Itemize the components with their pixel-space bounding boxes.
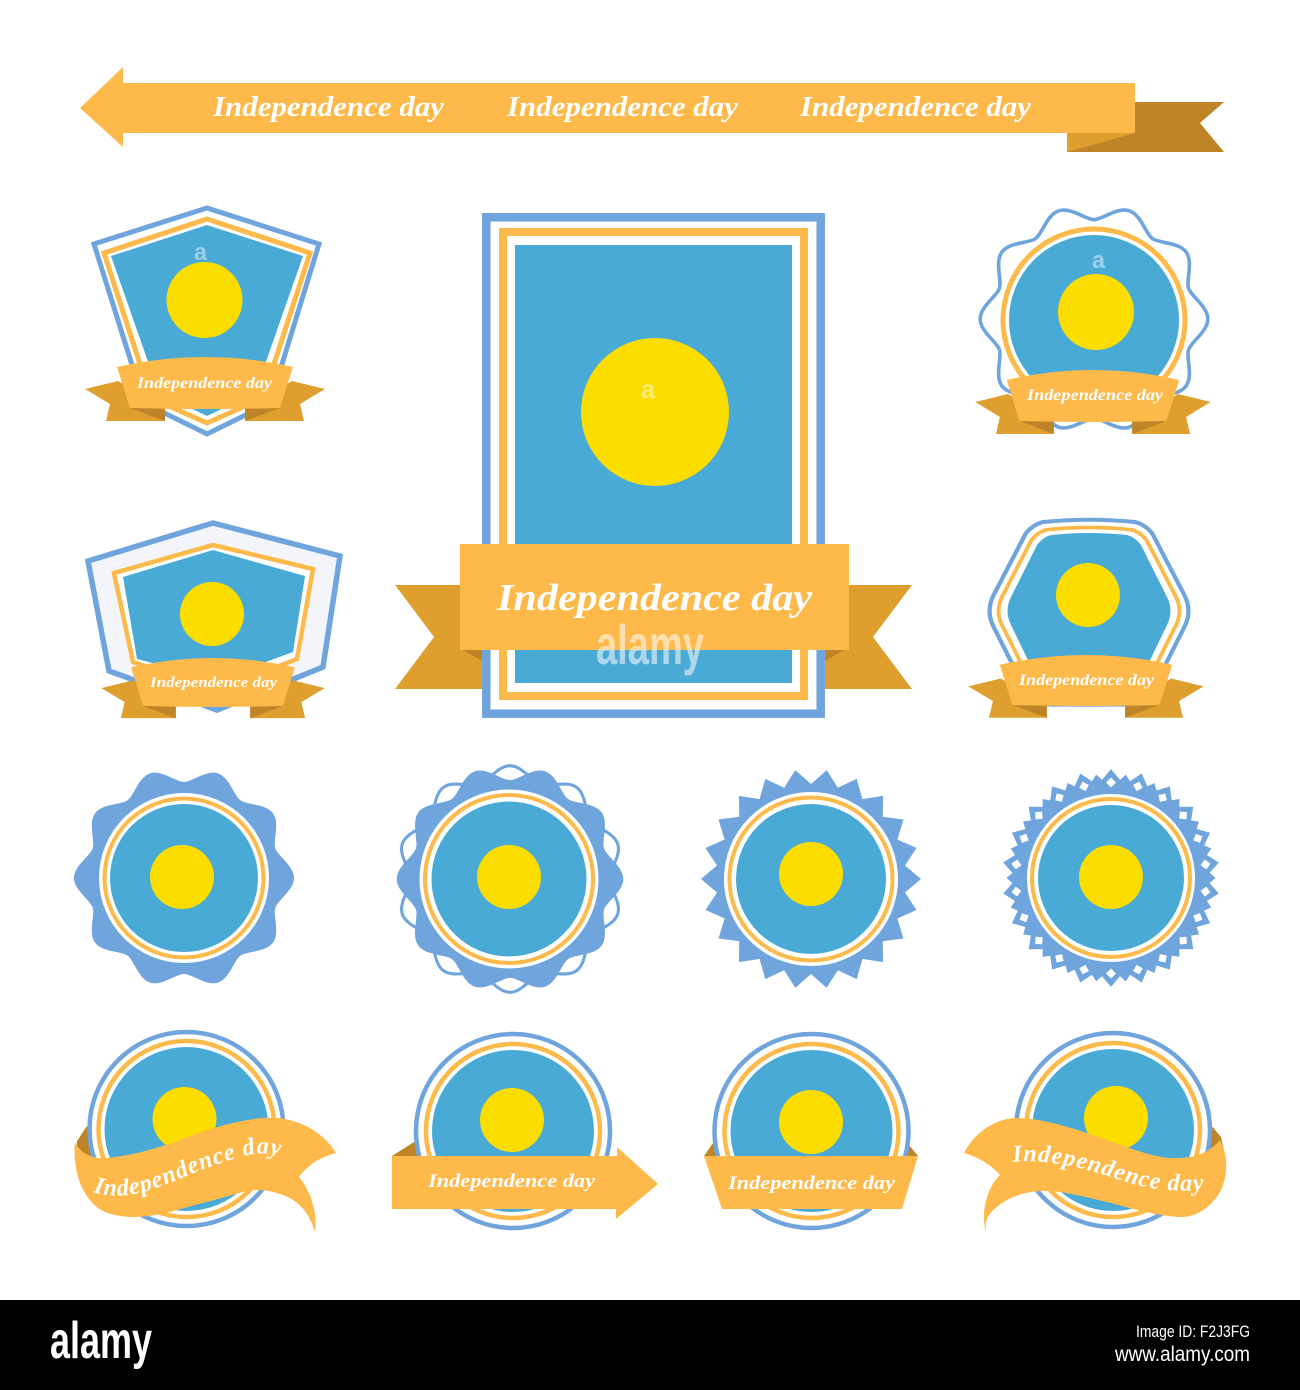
orange shield ring xyxy=(114,545,313,690)
flag field xyxy=(515,245,792,683)
yellow disc xyxy=(1084,1086,1148,1150)
yellow disc xyxy=(152,1087,216,1151)
ribbon fold xyxy=(1200,1125,1226,1160)
hollow diamonds xyxy=(1011,778,1211,978)
yellow disc xyxy=(477,845,541,909)
shield badge 2 xyxy=(88,523,340,718)
banner text 1: Independence day xyxy=(212,92,445,123)
orange frame xyxy=(503,232,804,696)
watermark: alamy xyxy=(596,613,704,676)
ribbon xyxy=(101,658,325,718)
yellow disc xyxy=(1056,563,1120,627)
logo: alamy xyxy=(50,1312,152,1370)
banner tail xyxy=(1067,102,1224,152)
url: www.alamy.com xyxy=(1114,1343,1250,1366)
yellow disc xyxy=(779,842,843,906)
orange ring xyxy=(98,1041,274,1217)
flag field xyxy=(730,1050,892,1212)
flag field xyxy=(110,804,258,952)
outer shield xyxy=(88,523,340,710)
flag field xyxy=(1038,805,1184,951)
hollow star seal xyxy=(994,760,1228,996)
orange ring xyxy=(1003,229,1185,411)
banner text 3: Independence day xyxy=(799,92,1032,123)
wave outline xyxy=(980,201,1208,437)
outer hexagon xyxy=(990,520,1188,705)
blue ring xyxy=(416,1034,610,1228)
trapezoid ribbon xyxy=(704,1156,918,1209)
blue ring xyxy=(90,1032,284,1226)
star burst xyxy=(701,770,921,988)
arrow ribbon xyxy=(392,1147,658,1219)
ribbon text: Independence day xyxy=(427,1171,596,1192)
blue ring xyxy=(1016,1033,1210,1227)
ribbon text: Independence day xyxy=(149,675,277,691)
round badge with trapezoid ribbon xyxy=(704,1034,918,1228)
white ring xyxy=(1027,794,1195,962)
orange hexagon xyxy=(999,528,1179,697)
ribbon text: Independence day xyxy=(1012,1146,1204,1196)
flag field xyxy=(111,225,303,416)
black strip xyxy=(0,1300,1300,1390)
ribbon xyxy=(968,655,1204,718)
wave seal xyxy=(74,764,294,992)
blue ring xyxy=(714,1034,908,1228)
yellow disc xyxy=(779,1090,843,1154)
ribbon xyxy=(85,357,325,421)
orange shield ring xyxy=(104,219,310,423)
star burst xyxy=(1003,769,1219,987)
ribbon fold xyxy=(392,1142,420,1156)
yellow disc xyxy=(150,845,214,909)
footer bar xyxy=(0,1300,1300,1390)
yellow disc xyxy=(166,262,242,338)
ribbon fold xyxy=(76,1126,100,1160)
star seal xyxy=(701,770,921,988)
round badge with right swoosh xyxy=(964,1030,1226,1232)
main ribbon xyxy=(460,544,849,650)
white ring xyxy=(724,792,898,966)
inner small spikes xyxy=(994,760,1228,996)
ribbon text: Independence day xyxy=(727,1173,896,1194)
white ring xyxy=(99,793,269,963)
image id: Image ID: F2J3FG xyxy=(1136,1322,1250,1341)
orange ring xyxy=(724,1044,898,1218)
wave outline xyxy=(366,733,654,1025)
flag field xyxy=(104,1047,268,1211)
double wave seal xyxy=(366,733,654,1025)
orange ring xyxy=(1026,1043,1200,1217)
wavy filled seal xyxy=(74,764,294,992)
yellow disc xyxy=(180,582,244,646)
round badge with left swoosh xyxy=(74,1030,336,1232)
yellow disc xyxy=(480,1088,544,1152)
ribbon text: Independence day xyxy=(136,375,273,392)
ribbon text: Independence day xyxy=(1018,672,1155,689)
ribbon tails xyxy=(395,585,482,689)
yellow disc xyxy=(1058,274,1134,350)
top arrow banner xyxy=(80,67,1224,152)
white ring xyxy=(420,790,598,968)
ribbon xyxy=(975,370,1211,434)
swoosh ribbon xyxy=(964,1118,1226,1232)
banner fold xyxy=(1067,133,1135,152)
watermark letter: a xyxy=(641,374,656,404)
flag field xyxy=(123,550,305,680)
wave seal xyxy=(397,762,623,996)
hexagon badge xyxy=(968,520,1204,718)
ribbon folds xyxy=(704,1143,725,1156)
round badge with arrow ribbon xyxy=(392,1034,658,1228)
yellow disc xyxy=(581,338,729,486)
yellow disc xyxy=(1079,845,1143,909)
flag field xyxy=(1008,533,1170,691)
ribbon heading: Independence day xyxy=(496,577,812,619)
ribbon text: Independence day xyxy=(92,1137,282,1198)
blue frame xyxy=(486,217,821,714)
flag field xyxy=(1032,1049,1194,1211)
flag field xyxy=(1009,235,1179,405)
flag field xyxy=(432,1050,594,1212)
outer shield xyxy=(94,208,319,434)
ribbon tail folds xyxy=(463,650,482,661)
swoosh ribbon xyxy=(75,1118,336,1232)
central flag panel xyxy=(395,217,912,714)
banner arrow body xyxy=(80,67,1135,147)
orange ring xyxy=(1032,799,1190,957)
orange ring xyxy=(730,798,892,960)
watermark letter: a xyxy=(194,239,208,266)
orange ring xyxy=(425,795,593,963)
orange ring xyxy=(426,1044,600,1218)
watermark letter: a xyxy=(1092,247,1106,274)
shield badge 1 xyxy=(85,208,325,434)
ribbon text: Independence day xyxy=(1026,387,1164,404)
flag field xyxy=(736,804,886,954)
wavy outline badge xyxy=(975,201,1211,437)
banner text 2: Independence day xyxy=(506,92,739,123)
flag field xyxy=(432,802,586,956)
orange ring xyxy=(104,798,264,958)
